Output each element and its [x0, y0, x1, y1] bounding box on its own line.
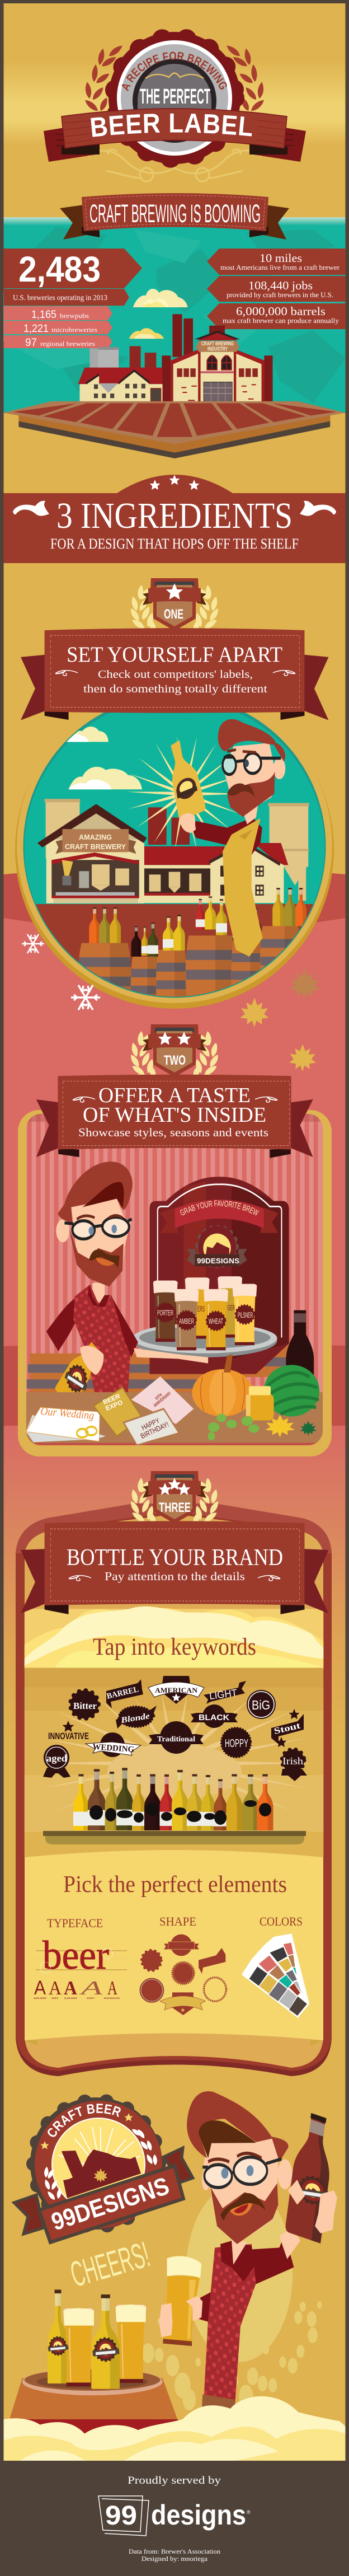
glass labels: WHEAT: [209, 1317, 223, 1326]
caption: U.S. breweries operating in 2013: [13, 293, 107, 302]
column: shape: [140, 1914, 227, 2015]
rim: [15, 687, 334, 1009]
swatch fan: [242, 1933, 309, 2018]
stat panel: 108,440 jobs: provided by craft brewers in the U.S.: [227, 291, 333, 299]
stat panel: 6,000,000 barrels: max craft brewer can produce annually: [223, 317, 339, 325]
keyword: hoppy: [221, 1728, 251, 1757]
stat panel: 10 miles: 10 miles: [260, 251, 302, 265]
ribbon tails: [14, 2195, 44, 2234]
heading banner: 3 ingredients: [3, 475, 346, 563]
banner: craft brewing is booming: [60, 193, 289, 240]
title badge: a recipe for brewing the perfect beer label: THE PERFECT: [140, 85, 210, 109]
clouds: [25, 1607, 323, 1670]
subhead: Showcase styles, seasons and events: [78, 1126, 268, 1139]
glass in hand: [159, 2256, 202, 2346]
keyword: bitter: [70, 1690, 98, 1718]
honey jar: [246, 1386, 274, 1421]
card text: anniversary: 10TH: [154, 1392, 163, 1401]
banner: set yourself apart: [21, 628, 328, 720]
dark bottle: [286, 1310, 314, 1380]
stat panel: brewery types: microbreweries: [51, 326, 97, 334]
ornament swirl below badge: [88, 149, 261, 181]
star: [166, 583, 183, 599]
tiny captions: SERIF: [51, 1997, 59, 1999]
glass labels: GER: [228, 1303, 235, 1312]
foam: [3, 2396, 346, 2462]
subhead: Pay attention to the details: [105, 1570, 245, 1583]
card text: happy birthday: BIRTHDAY!: [139, 1420, 170, 1440]
table bottles and glasses: [48, 2289, 68, 2383]
letter samples: A: [64, 1977, 78, 1999]
keyword: blonde: Blonde: [120, 1712, 150, 1725]
keyword: irish: Irish: [282, 1755, 303, 1767]
column: typeface: TYPEFACE: [47, 1916, 103, 1930]
logo on arch: [187, 1226, 247, 1267]
letter samples: [34, 1977, 118, 1999]
bottle row: [73, 1768, 273, 1830]
keyword: big: [247, 1690, 276, 1719]
icon: snowflake lower: [71, 985, 100, 1010]
glass labels: [157, 1303, 253, 1326]
title: 3 INGREDIENTS: [56, 495, 293, 536]
card text: beer expo: BEER: [102, 1393, 121, 1406]
glass labels: PORTER: [157, 1308, 173, 1317]
keyword: barrel: [106, 1679, 143, 1708]
logo: 99designs: designs: [151, 2499, 246, 2531]
keyword: traditional: [149, 1721, 204, 1754]
card text: beer expo: EXPO: [105, 1399, 124, 1412]
letter samples: A: [34, 1977, 46, 1999]
keyword: wedding: WEDDING: [92, 1743, 135, 1754]
cards: [26, 1376, 194, 1445]
sign text: [65, 833, 126, 851]
footer: [0, 2461, 349, 2576]
keyword: light: [204, 1681, 246, 1704]
proudly served: Proudly served by: [128, 2475, 221, 2486]
wordmark: 99DESIGNS: [48, 2172, 172, 2236]
keyword: stout: Stout: [273, 1721, 302, 1736]
beer glasses: [153, 1276, 257, 1350]
keyword: barrel: BARREL: [106, 1685, 140, 1701]
rays behind bottles: [40, 1692, 310, 1814]
wheat: [44, 2128, 158, 2201]
stars: [150, 475, 199, 490]
badge: three: [129, 1471, 220, 1533]
watermelon: [264, 1365, 319, 1416]
silos: [89, 347, 119, 402]
factory sign: [201, 341, 234, 353]
stat panel: 6,000,000 barrels: [207, 303, 346, 329]
tiny captions: SCRIPT: [87, 1997, 95, 1999]
wheat wreath right: [225, 44, 266, 113]
heading: BOTTLE YOUR BRAND: [67, 1545, 283, 1571]
keyword: light: LIGHT: [209, 1687, 238, 1702]
stat panel: brewery types: 97: [25, 337, 37, 349]
label: TWO: [164, 1053, 186, 1068]
keyword: irish: [281, 1749, 307, 1781]
card text: our wedding: Our Wedding: [40, 1405, 95, 1422]
brewer head: [56, 1161, 133, 1287]
letter samples: A: [107, 1977, 118, 1999]
platform: [3, 401, 346, 458]
sign text: CRAFT BREWERY: [65, 842, 126, 851]
stat panel: 2,483 breweries: [3, 249, 142, 306]
scalloped seal: [109, 32, 240, 164]
inner: [25, 1514, 323, 2068]
icon: maple leaf gold: [240, 997, 268, 1027]
brewer shirt: [46, 1283, 208, 1392]
card text: happy birthday: [136, 1413, 170, 1440]
keyword: innovative: INNOVATIVE: [48, 1731, 89, 1741]
tiny captions: [34, 1997, 120, 1999]
stars: [158, 1032, 191, 1045]
card text: happy birthday: HAPPY: [140, 1416, 161, 1432]
stat panel: 108,440 jobs: [207, 276, 346, 302]
lower section: [25, 1850, 323, 2040]
big logo: [11, 2095, 195, 2245]
clouds over the sea: [129, 289, 188, 339]
keyword: american: [148, 1676, 204, 1704]
beer sample: beer: [43, 1933, 109, 1978]
head: [187, 2091, 293, 2244]
wall stripes: [26, 1114, 324, 1447]
shirt and sleeves: [199, 2228, 300, 2419]
beer bottles: [89, 888, 306, 957]
tiny captions: SLAB-SERIF: [64, 1997, 78, 1999]
glass labels: AMBER: [179, 1317, 194, 1326]
chalkboard arch: [149, 1177, 289, 1374]
tray: [133, 1323, 277, 1357]
stat panel: brewery types: 1,165: [31, 309, 56, 321]
building silhouette: [62, 2149, 141, 2198]
heading: tap into keywords: Tap into keywords: [93, 1634, 256, 1660]
barrels backdrop: [27, 1338, 289, 1393]
factory sign: INDUSTRY: [207, 346, 228, 353]
stat panel: brewery types: [3, 306, 112, 349]
keyword: black: [191, 1704, 238, 1728]
sign text: AMAZING: [79, 833, 112, 841]
herbs and leaves: [208, 1414, 317, 1440]
icon: maple leaf gold small: [289, 1044, 316, 1072]
scene content clipped to circle: [25, 713, 324, 996]
stat panel: 10 miles: most Americans live from a craft brewer: [220, 264, 340, 271]
column: typeface: [34, 1916, 127, 1999]
starburst: [126, 736, 243, 852]
silos: [46, 800, 308, 901]
card text: beer expo: [102, 1393, 124, 1412]
credits: Data from: Brewer's Association: [129, 2549, 220, 2555]
icon: snowflake: [22, 934, 44, 953]
factory sign: CRAFT BREWING: [201, 341, 234, 347]
curved heading: a recipe for brewing: A RECIPE FOR BREWING: [122, 51, 227, 91]
keyword: american: AMERICAN: [155, 1686, 198, 1694]
cheers lettering: CHEERS!: [66, 2234, 154, 2294]
held bottle: [171, 740, 206, 818]
bottle in hand: [285, 2110, 337, 2244]
keyword: aged: [43, 1745, 70, 1778]
keyword: black: BLACK: [199, 1713, 230, 1722]
column: colors: [242, 1914, 309, 2018]
keyword: traditional: Traditional: [157, 1735, 195, 1744]
banner: offer a taste: OF WHAT'S INSIDE: [83, 1103, 266, 1127]
ribbon main: [62, 109, 287, 148]
ribbon tails: [44, 122, 306, 162]
ribbon: [39, 2166, 183, 2242]
keyword: hoppy: HOPPY: [225, 1737, 248, 1750]
amazing brewery: [37, 804, 147, 903]
logo: 99designs: 99: [105, 2501, 137, 2531]
wheat wreath left: [83, 44, 124, 113]
banner: bottle your brand: [21, 1521, 328, 1614]
stat panel: 108,440 jobs: 108,440 jobs: [248, 279, 313, 292]
seasonal decorations: [22, 934, 320, 1072]
left warehouse: [78, 368, 163, 402]
title badge: a recipe for brewing the perfect beer label: [44, 29, 306, 182]
glow and bubbles: [142, 2183, 322, 2410]
panel: offer a taste scene: [18, 1110, 332, 1456]
badge: two: [129, 1024, 220, 1086]
label: THREE: [159, 1500, 191, 1515]
floor: [36, 904, 313, 996]
subhead: Check out competitors' labels,: [98, 668, 253, 681]
tiny captions: SANS-SERIF: [34, 1997, 47, 1999]
keyword: innovative: [48, 1721, 89, 1741]
keyword: stout: [271, 1709, 304, 1747]
stat panel: 6,000,000 barrels: 6,000,000 barrels: [236, 305, 326, 318]
cheers scene: [3, 2091, 346, 2461]
column: colors: COLORS: [260, 1914, 303, 1928]
banner: offer a taste: [36, 1075, 313, 1158]
stat panel: brewery types: regional breweries: [40, 340, 95, 348]
flourish left: [13, 501, 49, 516]
badge: one: [129, 578, 220, 640]
brewer apron and arm: [179, 804, 263, 957]
chimneys: [148, 807, 190, 845]
table: [26, 1392, 324, 1447]
barrels: [78, 926, 299, 996]
stars: [159, 1478, 190, 1495]
stat panel: brewery types: 1,221: [23, 323, 49, 335]
letter samples: A: [79, 1977, 103, 1999]
flourish right: [300, 501, 336, 516]
small chimneys: [130, 314, 273, 402]
logo: 99designs: [98, 2496, 251, 2536]
heading: SET YOURSELF APART: [67, 643, 282, 667]
logo text on arch: 99DESIGNS: [197, 1257, 239, 1265]
long building: [144, 846, 224, 903]
scene: circular brewery with brewer: [15, 712, 334, 1009]
outer frame: [16, 1504, 332, 2076]
illustration: brewery factory on platform: [3, 314, 346, 458]
arch ribbon text: GRAB YOUR FAVORITE BREW: [180, 1200, 260, 1216]
brewer bottle and hand: [55, 1342, 104, 1393]
seal text: CRAFT BEER: [48, 2104, 121, 2137]
panel: bottle your brand: [16, 1504, 332, 2076]
keyword: big: BiG: [252, 1698, 270, 1712]
heading: pick the perfect elements: Pick the perfect elements: [63, 1872, 287, 1898]
pumpkin: [192, 1354, 253, 1416]
subtitle: FOR A DESIGN THAT HOPS OFF THE SHELF: [50, 536, 299, 552]
stat panel: brewery types: brewpubs: [60, 312, 89, 320]
keyword: blonde: [116, 1706, 157, 1729]
banner: set yourself apart: then do something totally different: [83, 683, 268, 695]
big number: 2,483: [18, 249, 101, 289]
label: ONE: [164, 607, 183, 622]
keyword: aged: aged: [46, 1753, 67, 1764]
tiny captions: MONOSPACED: [104, 1997, 120, 1999]
column: shape: SHAPE: [159, 1914, 196, 1928]
frame: [18, 1110, 332, 1456]
heading: OFFER A TASTE: [98, 1084, 251, 1107]
panel: offer a taste scene: PILSNER: [238, 1310, 253, 1319]
right house: [209, 843, 288, 903]
main hall: [171, 331, 264, 402]
letter samples: A: [49, 1977, 62, 1999]
brewer raising glass: [159, 2091, 337, 2419]
footer: Designed by: mnoriega: [142, 2556, 207, 2563]
brewer head: [218, 719, 285, 817]
barrel table: [9, 2289, 178, 2434]
keyword: bitter: Bitter: [73, 1701, 97, 1711]
card text: anniversary: [150, 1387, 172, 1408]
glass labels: ERS: [197, 1304, 205, 1313]
clouds: [64, 727, 142, 789]
heading: beer label: BEER LABEL: [91, 113, 252, 137]
logo: 99designs: ®: [247, 2509, 251, 2515]
icon: maple leaf brown: [290, 968, 320, 1000]
keyword band: [25, 1668, 323, 1857]
shelf: [43, 1831, 306, 1844]
stat panel: 10 miles: [207, 249, 346, 275]
card text: anniversary: ANNIVERSARY: [153, 1390, 172, 1408]
keyword: wedding: [86, 1732, 141, 1757]
